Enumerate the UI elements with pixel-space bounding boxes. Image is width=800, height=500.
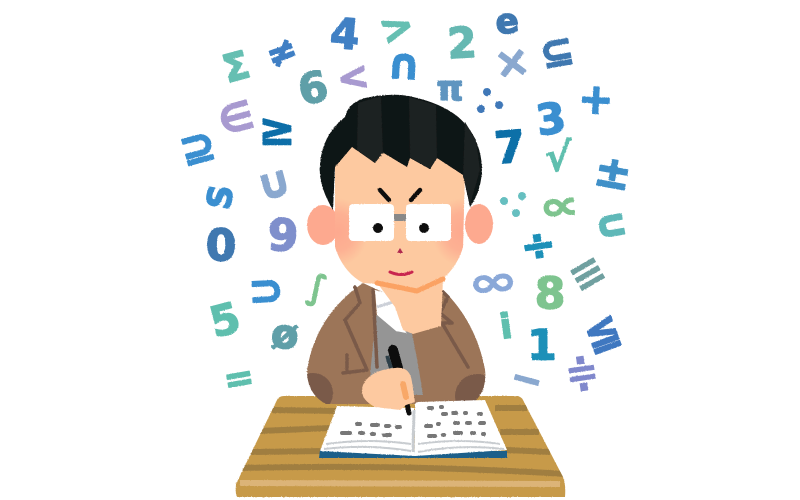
- symbol: less or equal: ≦: [577, 302, 627, 362]
- elbow patches: [307, 373, 486, 404]
- symbol: infinity: ∞: [466, 256, 520, 308]
- symbol: superset or equal: ⊇: [175, 120, 221, 176]
- symbol: square root: √: [545, 135, 572, 181]
- symbol: times: ×: [491, 35, 533, 89]
- symbol: 8: 8: [535, 268, 565, 320]
- symbol: 1: 1: [527, 320, 557, 370]
- nose: [397, 248, 403, 253]
- symbol: union: ∪: [251, 155, 297, 211]
- shirt collar: [375, 290, 406, 333]
- symbol: element of: ∈: [214, 92, 258, 144]
- symbol: plus: +: [577, 74, 615, 124]
- symbol: intersection: ∩: [386, 39, 422, 89]
- symbol: 6: 6: [294, 61, 332, 115]
- symbol: dotted equals: ≑: [562, 348, 602, 398]
- symbol: integral: ∫: [304, 267, 330, 309]
- cheeks: [334, 203, 464, 260]
- symbol: superset: ⊃: [247, 265, 285, 315]
- eyebrows: [380, 190, 420, 200]
- symbol: S: S: [199, 182, 241, 212]
- symbol: 3: 3: [533, 93, 569, 145]
- desk: [236, 396, 565, 497]
- symbol: subset: ∩: [585, 206, 635, 246]
- symbol: 7: 7: [493, 121, 527, 175]
- lapel lines: [343, 287, 468, 373]
- glasses: [349, 204, 451, 241]
- hair: [320, 95, 482, 210]
- symbol: dots: [500, 192, 526, 217]
- symbol: greater than: >: [374, 1, 420, 55]
- floating math symbols: [175, 1, 636, 404]
- pen: [387, 350, 409, 413]
- symbol: 4: 4: [328, 8, 362, 60]
- symbol: not equal: ≠: [261, 29, 303, 77]
- symbol: 5: 5: [205, 293, 245, 347]
- man and desk: [236, 95, 565, 497]
- symbol: 9: 9: [266, 210, 300, 262]
- face: [335, 130, 465, 292]
- symbol: i: i: [497, 306, 515, 348]
- mouth: [390, 272, 412, 274]
- jacket: [306, 283, 486, 404]
- symbol: sigma: Σ: [218, 42, 254, 92]
- symbol: 2: 2: [446, 18, 478, 68]
- symbol: plus minus: ±: [590, 145, 636, 201]
- symbol: minus: −: [506, 354, 548, 404]
- symbol: proportional: ∝: [537, 181, 581, 231]
- symbol: subset or equal: ⊆: [537, 27, 577, 79]
- open notebook: [319, 400, 507, 458]
- symbol: divide: ÷: [517, 218, 559, 272]
- hand on chin: [378, 279, 443, 334]
- ears: [307, 204, 493, 245]
- symbol: empty set: ø: [269, 311, 301, 359]
- symbol: greater or equal: ≥: [259, 104, 295, 156]
- notebook text marks: [342, 407, 484, 436]
- symbol: e: e: [493, 1, 521, 43]
- symbol: 0: 0: [206, 220, 236, 272]
- symbol: equals: =: [221, 356, 257, 402]
- symbol: less than: <: [334, 53, 372, 101]
- vest: [368, 315, 423, 395]
- symbol: identical: ≡: [560, 243, 614, 303]
- symbol: pi: π: [437, 69, 463, 109]
- eyes: [373, 223, 429, 233]
- jacket right sleeve: [412, 290, 485, 404]
- chin line: [377, 279, 443, 291]
- symbol: therefore: [477, 88, 503, 113]
- writing hand: [362, 368, 415, 410]
- finger highlight: [403, 384, 406, 397]
- illustration: man solving math at a desk: [181, 12, 629, 498]
